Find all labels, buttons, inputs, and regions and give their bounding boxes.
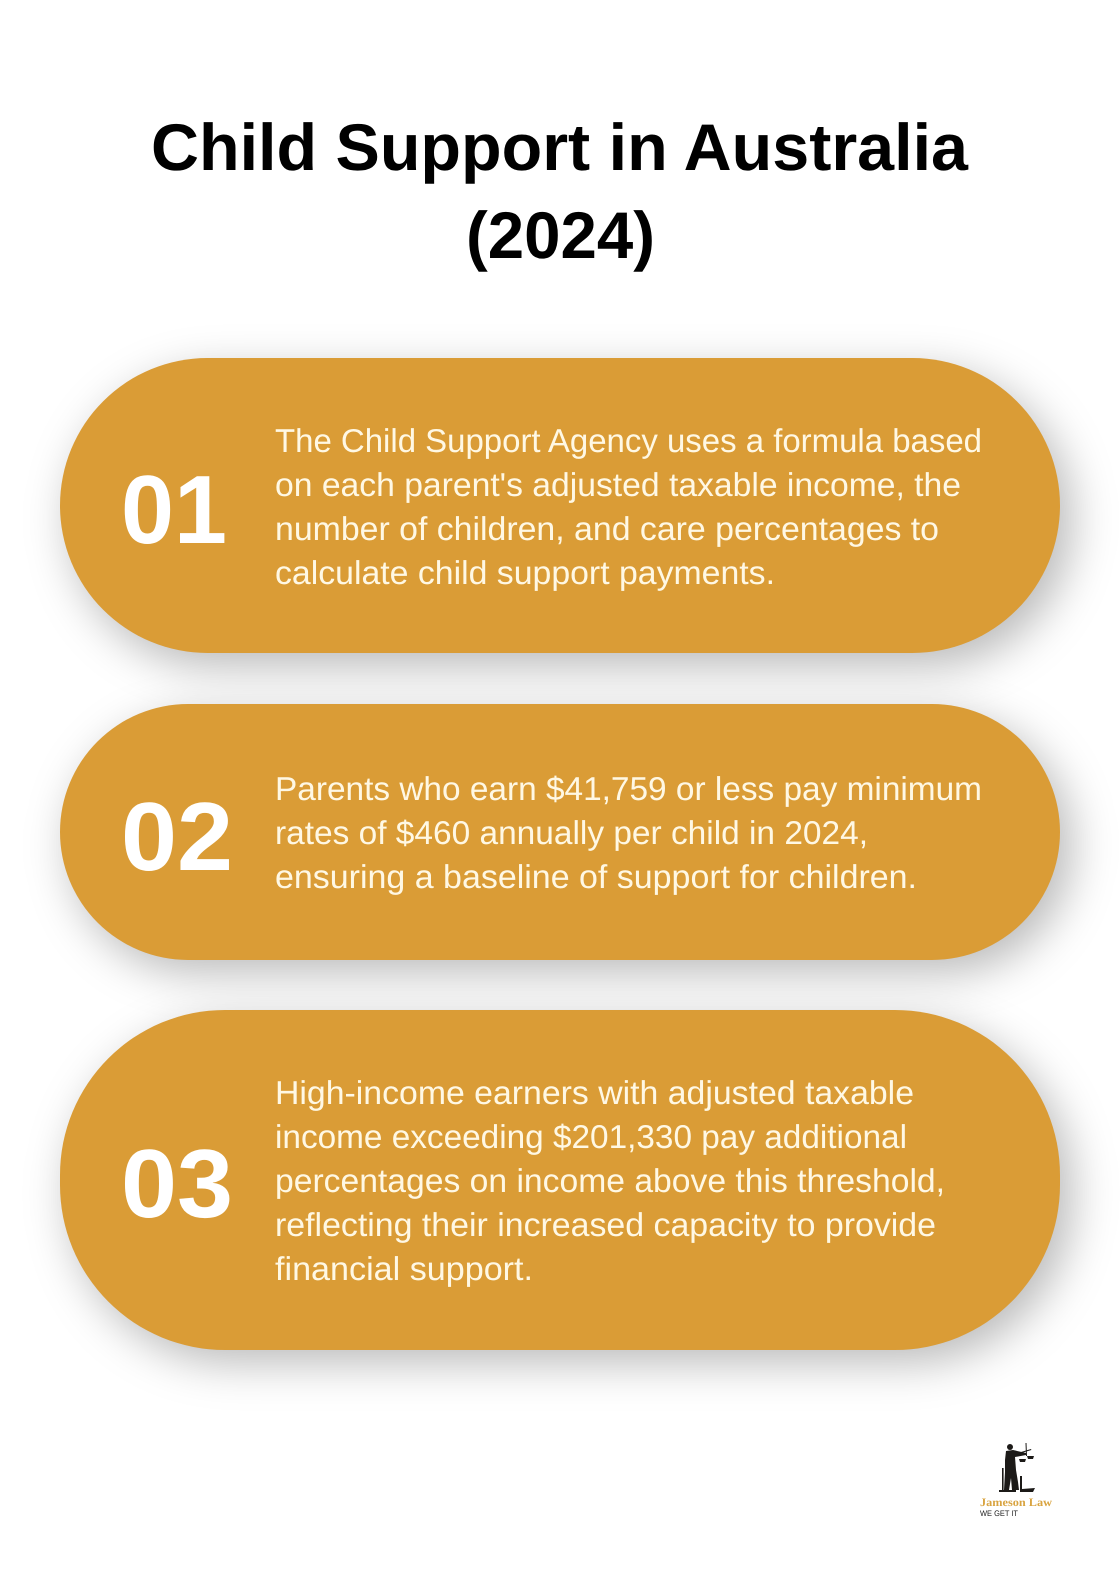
icon: lady justice figure	[999, 1443, 1035, 1492]
text: card 01 description: number of children, and care percentages to	[275, 510, 939, 547]
number 03: 03	[121, 1129, 233, 1238]
logo text: tagline: WE GET IT	[980, 1509, 1018, 1518]
panel: card 01	[60, 358, 1072, 667]
text: card 03 description: percentages on income above this threshold,	[275, 1162, 945, 1199]
logo text: Jameson Law: Jameson Law	[980, 1497, 1053, 1509]
title	[151, 110, 969, 272]
text: card 03 description: High-income earners with adjusted taxable	[275, 1074, 914, 1111]
text: card 02 description	[275, 770, 982, 895]
number 01: 01	[121, 455, 227, 564]
text: card 02 description: ensuring a baseline of support for children.	[275, 858, 917, 895]
panel: card 03	[60, 1010, 1072, 1363]
number 02: 02	[121, 782, 233, 891]
logo: Jameson Law	[980, 1443, 1053, 1518]
text: card 03 description: income exceeding $201,330 pay additional	[275, 1118, 907, 1155]
title: (2024)	[466, 198, 655, 272]
text: card 01 description	[275, 422, 982, 591]
panel: card 02	[60, 704, 1072, 973]
text: card 03 description: reflecting their increased capacity to provide	[275, 1206, 936, 1243]
text: card 03 description: financial support.	[275, 1250, 533, 1287]
text: card 01 description: The Child Support Agency uses a formula based	[275, 422, 982, 459]
text: card 02 description: rates of $460 annually per child in 2024,	[275, 814, 868, 851]
text: card 02 description: Parents who earn $41,759 or less pay minimum	[275, 770, 982, 807]
text: card 01 description: calculate child support payments.	[275, 554, 775, 591]
text: card 01 description: on each parent's adjusted taxable income, the	[275, 466, 961, 503]
title: Child Support in Australia	[151, 110, 969, 184]
text: card 03 description	[275, 1074, 945, 1287]
